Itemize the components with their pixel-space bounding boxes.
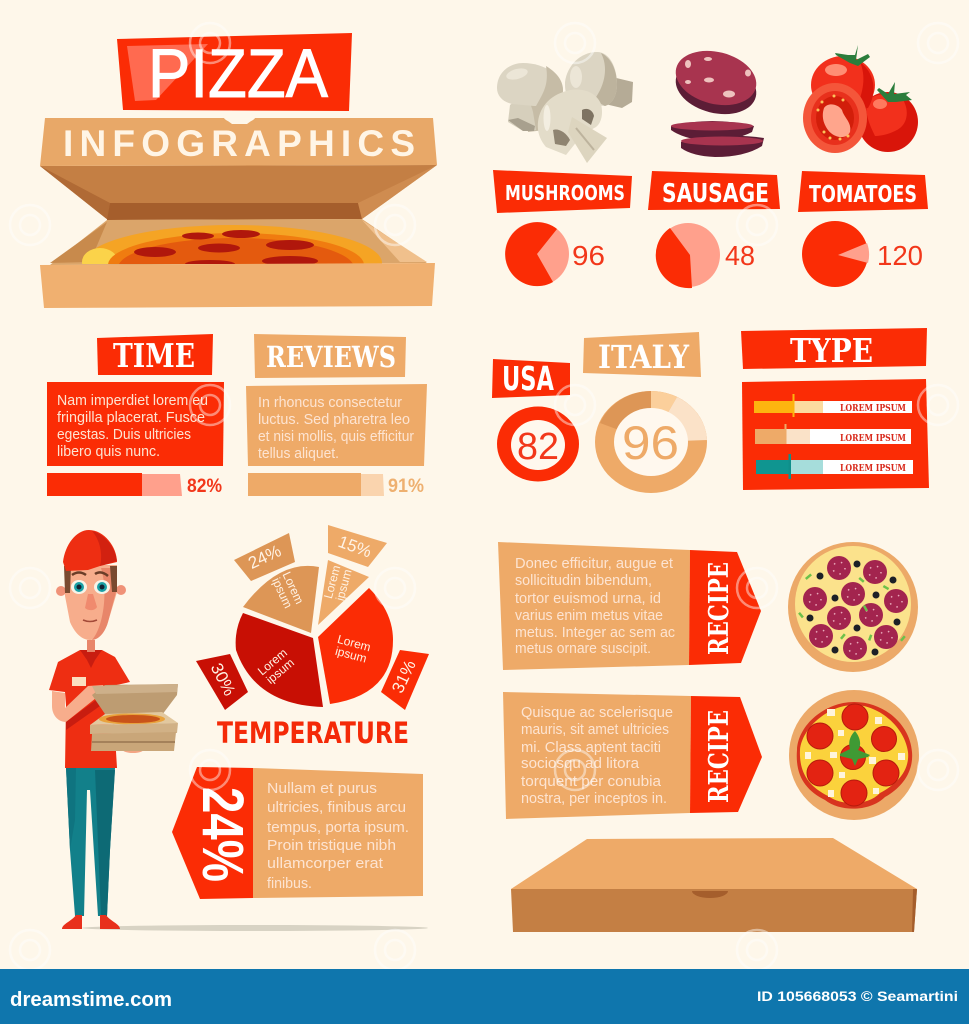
label: tomatoes: TOMATOES	[809, 182, 917, 208]
pie: tomatoes 120	[802, 221, 923, 287]
text block: reviews	[246, 384, 427, 466]
bar row: tan: LOREM IPSUM	[840, 434, 906, 444]
text block: reviews: tellus aliquet.	[258, 446, 339, 462]
slice 15%: Lorem	[321, 564, 343, 600]
bar row: tan	[755, 424, 911, 444]
panel: type bars	[742, 379, 929, 490]
open pizza box with infographics lid: INFOGRAPHICS	[63, 123, 415, 164]
heading: time: TIME	[113, 336, 195, 375]
callout: 24%	[172, 767, 423, 899]
recipe 2 callout: torquent per conubia	[521, 774, 662, 790]
recipe 2 callout	[503, 692, 762, 819]
slice 30%: ipsum	[263, 655, 297, 687]
bar: reviews 91%: 91%	[388, 476, 424, 497]
flag: 31%	[381, 650, 429, 710]
icon: tomato pizza	[789, 690, 919, 820]
heading: type: TYPE	[790, 331, 873, 370]
text block: time: libero quis nunc.	[57, 444, 160, 460]
donut: italy 96	[595, 391, 707, 493]
recipe 2 callout: mauris, sit amet ultricies	[521, 722, 669, 738]
pie: mushrooms 96	[505, 222, 605, 286]
slice 24%	[243, 566, 319, 633]
text block: time	[47, 382, 224, 466]
stems	[835, 45, 870, 66]
slice 24%: Lorem	[280, 569, 307, 606]
pizza in the box	[82, 225, 382, 264]
legs	[66, 768, 115, 916]
shirt	[49, 650, 130, 768]
callout: 24%: ullamcorper erat	[267, 856, 383, 872]
flag: 24%: 24%	[245, 541, 284, 573]
pie: sausage 48: 48	[725, 240, 755, 271]
text block: time: fringilla placerat. Fusce	[57, 410, 205, 426]
flag: 24%	[234, 533, 295, 581]
open pizza box with infographics lid	[40, 118, 437, 308]
right tomato	[858, 92, 918, 152]
callout: 24%: Proin tristique nibh	[267, 838, 396, 854]
recipe 1 callout	[498, 542, 761, 670]
label: sausage	[648, 171, 780, 210]
footer bar: dreamstime.com	[10, 989, 172, 1011]
slice 15%	[318, 560, 369, 625]
icon: tomatoes	[803, 45, 918, 153]
bar row: teal	[756, 454, 913, 479]
badge: usa 82	[497, 406, 579, 482]
shoes	[62, 915, 82, 929]
slice 24%: ipsum	[269, 575, 295, 610]
slice 15%: ipsum	[333, 568, 355, 602]
callout: 24%: tempus, porta ipsum.	[267, 820, 409, 836]
label: tomatoes	[798, 171, 928, 212]
top tomato	[811, 56, 875, 114]
bar row: teal: LOREM IPSUM	[840, 464, 906, 474]
text block: reviews: luctus. Sed pharetra leo	[258, 412, 410, 428]
callout: 24%: Nullam et purus	[267, 781, 377, 797]
pie: sausage 48	[656, 223, 755, 288]
flag: 31%: 31%	[388, 657, 420, 696]
recipe 2 callout: mi. Class aptent taciti	[521, 740, 661, 756]
closed pizza box	[511, 838, 917, 932]
footer bar	[0, 969, 969, 1024]
pie: tomatoes 120: 120	[877, 240, 923, 271]
bar: reviews 91%	[248, 473, 424, 497]
slice 31%	[318, 588, 393, 704]
back right stem	[605, 76, 633, 108]
left mushroom underside	[525, 102, 562, 132]
chart: temperature pie	[196, 525, 429, 710]
arm	[52, 685, 105, 722]
heading: reviews: REVIEWS	[266, 340, 396, 374]
left cap	[497, 63, 563, 106]
cap	[63, 530, 117, 571]
icon: pepperoni pizza	[788, 542, 918, 672]
recipe 1 callout: metus ornare suscipit.	[515, 641, 651, 657]
back right cap	[565, 52, 617, 106]
front cap	[538, 90, 602, 155]
bar: time 82%: 82%	[187, 476, 222, 497]
callout: 24%: 24%	[190, 787, 255, 882]
flag: 15%	[328, 525, 387, 567]
heading: temperature: TEMPERATURE	[217, 716, 409, 750]
box held	[90, 684, 178, 753]
heading: usa: USA	[502, 359, 554, 398]
title: pizza banner: PIZZA	[148, 35, 328, 112]
text block: time: Nam imperdiet lorem eu	[57, 393, 208, 409]
front stem	[568, 117, 607, 163]
label: sausage: SAUSAGE	[662, 179, 769, 209]
slice 31%: ipsum	[334, 644, 368, 666]
recipe 1 callout: sollicitudin bibendum,	[515, 573, 652, 589]
donut: italy 96: 96	[622, 416, 679, 469]
recipe 2 callout: nostra, per inceptos in.	[521, 791, 667, 807]
flag: 30%	[196, 654, 248, 710]
recipe 1 callout: varius enim metus vitae	[515, 608, 663, 624]
heading: type	[741, 328, 927, 370]
label: mushrooms	[493, 170, 632, 213]
cut tomato	[803, 83, 867, 153]
slice 30%: Lorem	[255, 646, 290, 678]
label: mushrooms: MUSHROOMS	[505, 181, 625, 205]
left stem	[508, 97, 536, 131]
head	[56, 586, 66, 596]
text block: time: egestas. Duis ultricies	[57, 427, 191, 443]
heading: italy: ITALY	[598, 338, 690, 376]
recipe 1 callout: metus. Integer ac sem ac	[515, 625, 675, 641]
icon: mushrooms	[497, 52, 633, 163]
recipe 2 callout: sociosqu ad litora	[521, 756, 640, 772]
recipe 2 callout: RECIPE	[704, 710, 735, 803]
ground shadow	[82, 925, 428, 931]
flag: 15%: 15%	[336, 532, 374, 562]
callout: 24%: finibus.	[267, 876, 312, 892]
heading: reviews	[254, 334, 406, 378]
bar row: orange: LOREM IPSUM	[840, 404, 906, 414]
character: delivery man	[49, 530, 178, 929]
recipe 1 callout: Donec efficitur, augue et	[515, 556, 673, 572]
recipe 1 callout: RECIPE	[704, 562, 735, 655]
badge: usa 82: 82	[517, 426, 559, 468]
footer bar: ID 105668053 © Seamartini	[757, 988, 958, 1004]
slice 31%: Lorem	[336, 632, 372, 654]
recipe 2 callout: Quisque ac scelerisque	[521, 705, 673, 721]
pie: mushrooms 96: 96	[572, 240, 605, 271]
slice 30%	[236, 613, 323, 707]
recipe 1 callout: tortor euismod urna, id	[515, 591, 661, 607]
bar: time 82%	[47, 473, 222, 497]
bar row: orange	[754, 394, 912, 417]
text block: reviews: In rhoncus consectetur	[258, 395, 402, 411]
flag: 30%: 30%	[207, 660, 239, 699]
text block: reviews: et nisi mollis, quis efficitur	[258, 429, 414, 445]
callout: 24%: ultricies, finibus arcu	[267, 800, 406, 816]
icon: sausage	[670, 43, 764, 157]
